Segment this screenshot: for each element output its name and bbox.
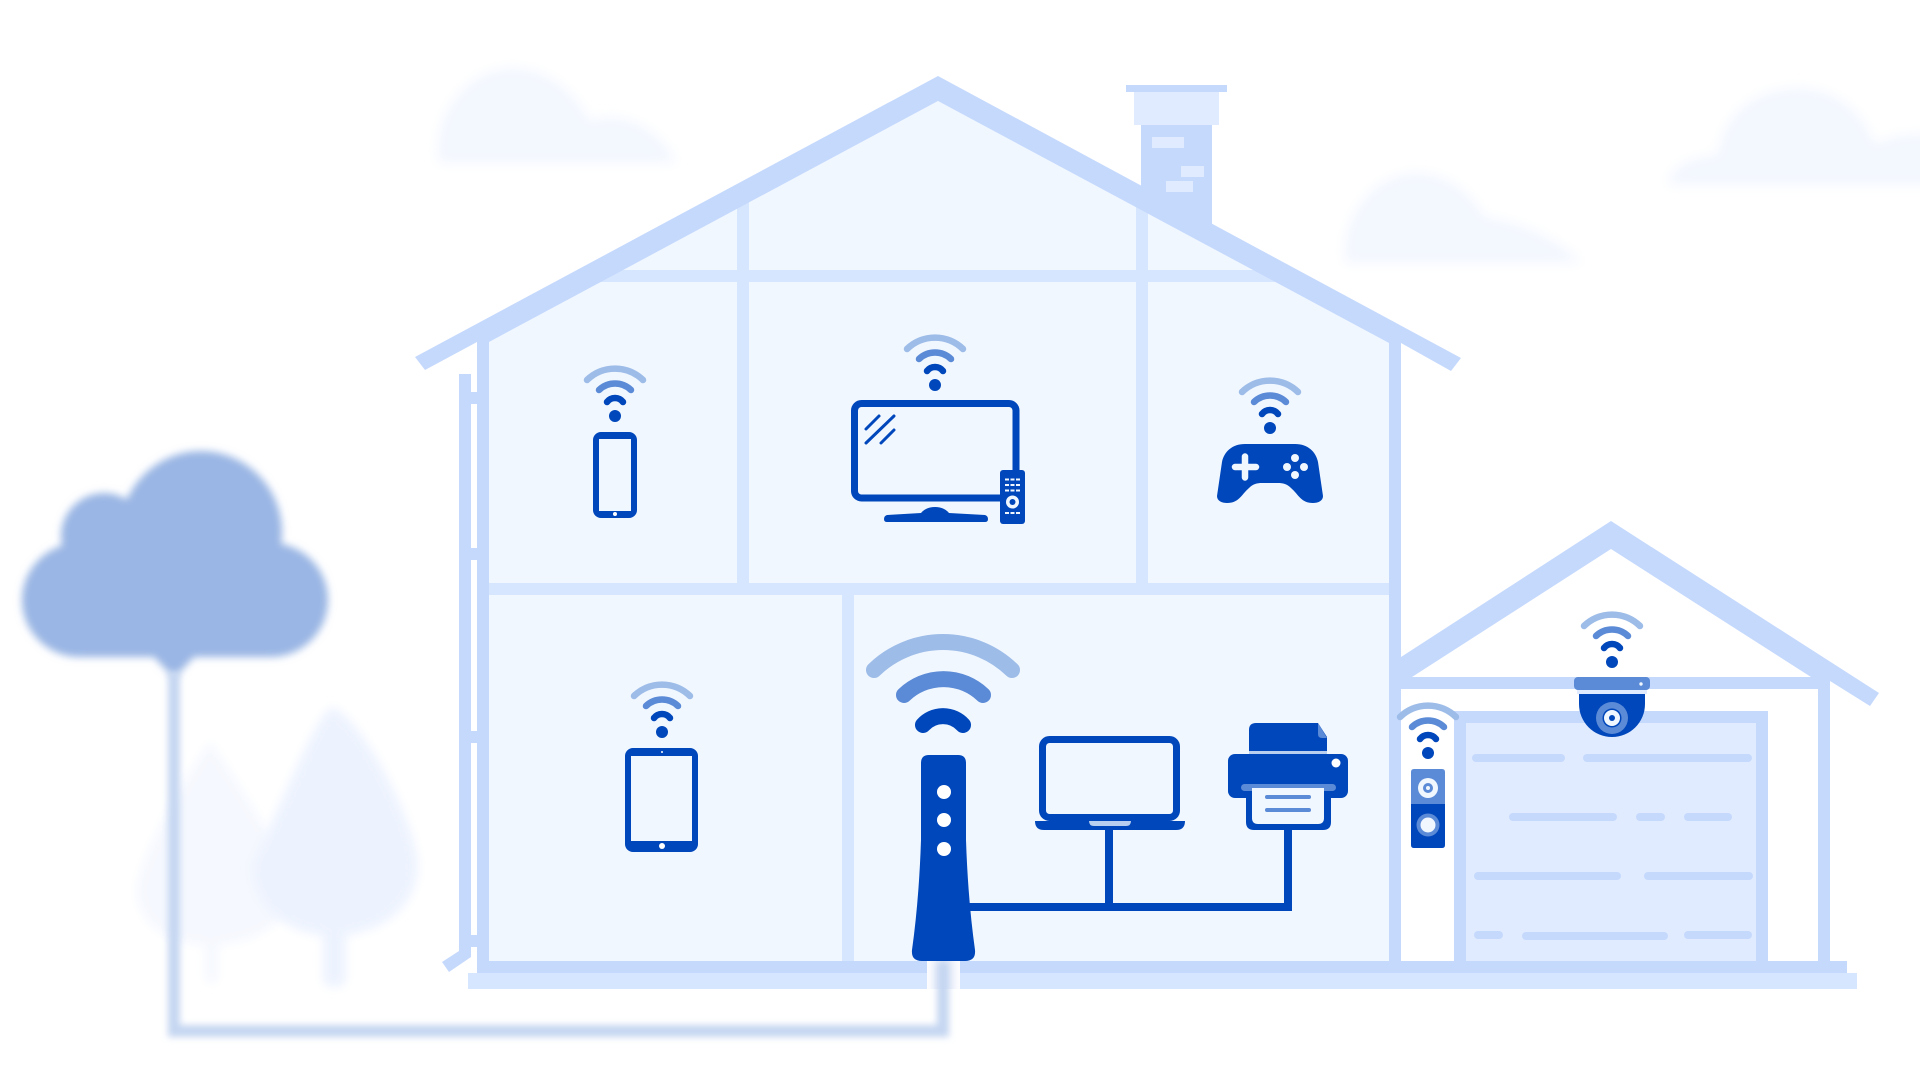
tablet	[625, 748, 698, 852]
house interior fill	[489, 101, 1389, 961]
background cloud: centre	[1345, 173, 1582, 263]
background tree: front	[252, 707, 418, 987]
printer	[1228, 723, 1348, 830]
game controller	[1217, 444, 1323, 503]
garage right wall	[1818, 681, 1830, 962]
wifi signal: tablet	[634, 685, 690, 738]
wifi signal: TV	[907, 338, 963, 391]
wifi signal: game controller	[1242, 381, 1298, 434]
wifi signal: doorbell	[1400, 706, 1456, 759]
network cables	[960, 826, 1292, 911]
chimney	[1126, 85, 1227, 226]
video doorbell	[1411, 769, 1445, 848]
router	[912, 755, 975, 961]
cable from cloud to router	[174, 672, 943, 1031]
garage roof	[1401, 521, 1879, 706]
garage ceiling beam	[1401, 677, 1830, 689]
conduit through the floor	[927, 961, 960, 989]
security camera	[1574, 677, 1650, 737]
background cloud: left	[437, 68, 677, 163]
background tree: back	[137, 742, 290, 983]
drain pipe	[442, 374, 477, 972]
floor beam and slab	[468, 961, 1857, 989]
wifi signal: security camera	[1584, 615, 1640, 668]
house outer walls	[477, 340, 1401, 962]
laptop	[1035, 740, 1185, 830]
television	[854, 404, 1016, 522]
internet cloud	[22, 451, 328, 676]
TV remote	[1000, 470, 1025, 524]
interior walls	[489, 190, 1389, 961]
garage door	[1454, 711, 1768, 962]
house roof	[415, 76, 1461, 371]
wifi signal: phone	[587, 369, 643, 422]
router wifi signal	[874, 642, 1012, 725]
background cloud: right	[1668, 88, 1920, 185]
phone	[593, 432, 637, 518]
